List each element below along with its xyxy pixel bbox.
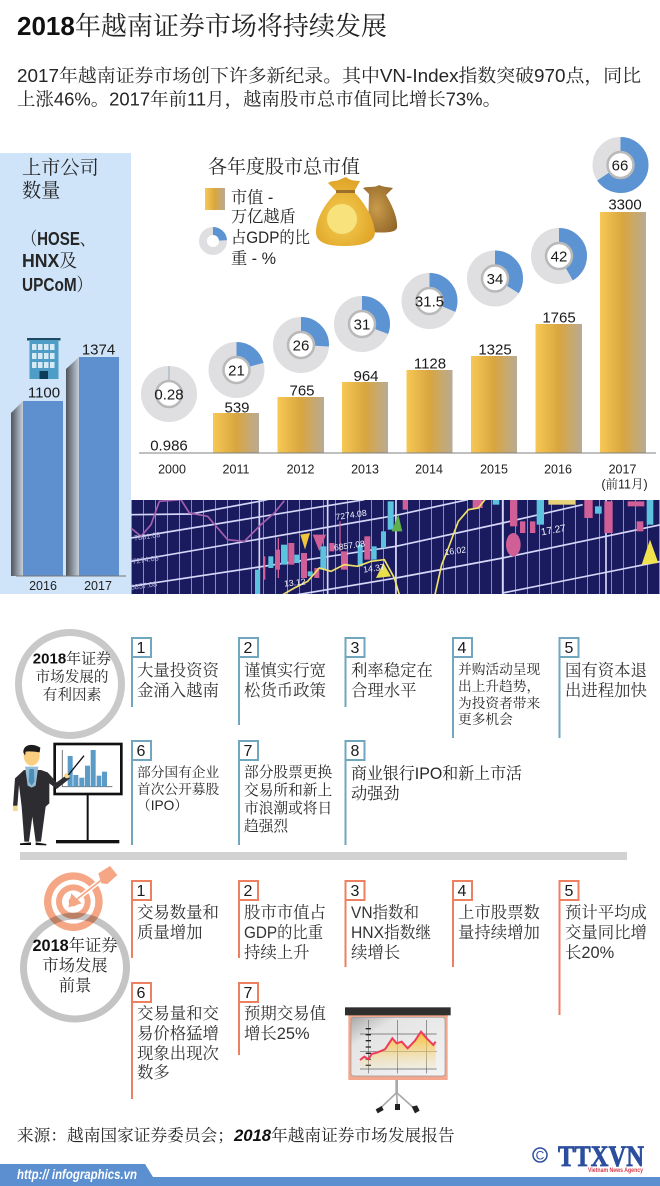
- factor 2: 谨慎实行宽: [244, 661, 326, 680]
- footer band: [0, 1164, 660, 1186]
- year 2012: 2012: [287, 462, 314, 476]
- year 2014: 1128: [414, 356, 446, 372]
- stock chart photo: 16.02: [444, 544, 467, 557]
- outlook 5: 5: [565, 883, 574, 900]
- outlook 7: 增长25%: [244, 1025, 310, 1043]
- stock chart photo: 6857.08: [130, 579, 158, 592]
- outlook 7: [239, 983, 326, 1055]
- outlook 6: 现象出现次: [137, 1045, 219, 1063]
- year 2015: 34: [487, 271, 503, 288]
- year 2017: [600, 145, 648, 492]
- year 2000: 0.986: [150, 438, 188, 454]
- year 2017: 2017: [609, 462, 636, 476]
- factor 1: 1: [137, 640, 146, 657]
- outlook 7: 7: [244, 985, 253, 1002]
- factor 8: 商业银行IPO和新上市活: [351, 765, 522, 783]
- outlook 4: [453, 881, 540, 967]
- factor 8: 8: [351, 743, 360, 760]
- factor 4: 更多机会: [458, 711, 513, 727]
- factor 6: [132, 741, 219, 845]
- year 2017: (前11月): [601, 478, 648, 492]
- factor 3: 3: [351, 640, 360, 657]
- panel heading: UPCoM）: [22, 275, 92, 295]
- factor 4: 并购活动呈现: [458, 661, 540, 677]
- outlook 3: 续增长: [351, 944, 400, 962]
- factor 6: 部分国有企业: [137, 765, 219, 780]
- outlook 2: [239, 881, 326, 962]
- outlook 6: 交易量和交: [137, 1005, 219, 1023]
- factor 7: 7: [244, 743, 253, 760]
- footer band: http:// infographics.vn: [17, 1166, 137, 1182]
- outlook 5: [560, 881, 647, 1015]
- year 2017: 66: [612, 158, 628, 174]
- factor 6: （IPO）: [137, 798, 188, 813]
- year 2016: 1765: [542, 310, 576, 326]
- outlook 3: 3: [351, 883, 360, 900]
- outlook 7: 预期交易值: [244, 1005, 326, 1023]
- factor 5: 出进程加快: [565, 682, 647, 700]
- title: 2018年越南证券市场将持续发展: [17, 11, 387, 41]
- outlook 5: 长20%: [565, 944, 614, 962]
- presenter: [13, 745, 84, 845]
- outlook 3: [346, 881, 431, 967]
- year 2015: 1325: [478, 342, 512, 358]
- bar: 2017 companies: [66, 342, 119, 593]
- panel heading: （HOSE、: [22, 229, 95, 249]
- logo: TTXVN: C: [536, 1148, 545, 1162]
- outlook 5: 交量同比增: [565, 924, 647, 942]
- logo: TTXVN: TTXVN: [558, 1140, 644, 1173]
- outlook 3: VN指数和: [351, 904, 419, 922]
- factor 2: 松货币政策: [244, 682, 326, 700]
- year 2017: 3300: [608, 196, 642, 214]
- year 2011: 539: [224, 400, 250, 416]
- icon: money bags: [316, 177, 397, 246]
- circle: development outlook: 市场发展: [42, 957, 108, 975]
- year 2012: 26: [293, 338, 309, 354]
- stock chart photo: 7881.08: [133, 530, 161, 543]
- factor 8: [346, 741, 522, 845]
- logo: TTXVN: [533, 1140, 644, 1174]
- circle: development outlook: 2018年证券: [32, 936, 118, 955]
- icon: projector screen with line chart: [345, 1007, 451, 1113]
- circle: development outlook: [24, 916, 126, 1019]
- stock chart photo: 14.37: [363, 562, 386, 575]
- source note: 来源：越南国家证券委员会；2018年越南证券市场发展报告: [17, 1125, 455, 1145]
- outlook 6: [132, 983, 219, 1099]
- panel heading: 上市公司: [22, 157, 99, 179]
- outlook 3: HNX指数继: [351, 924, 431, 942]
- presentation board: [55, 744, 121, 843]
- bar: 2017 companies: 1374: [82, 342, 115, 358]
- legend: [203, 188, 310, 268]
- panel heading: HNX及: [22, 251, 77, 271]
- stock chart photo: 13.12: [283, 576, 306, 589]
- factor 7: 交易所和新上: [244, 782, 332, 799]
- factor 1: [132, 638, 220, 707]
- bar chart: market capitalisation: [139, 145, 656, 492]
- intro text: 上涨46%。2017年前11月，越南股市总市值同比增长73%。: [17, 88, 501, 110]
- icon: presenter with chart: [13, 744, 121, 845]
- factor 5: 5: [565, 640, 574, 657]
- year 2015: 2015: [480, 462, 508, 476]
- factor 5: [560, 638, 647, 738]
- factor 2: 2: [244, 640, 253, 657]
- factor 4: 出上升趋势，: [458, 678, 540, 695]
- year 2012: 765: [289, 382, 315, 400]
- factor 4: 4: [458, 640, 467, 657]
- legend donut: [203, 231, 223, 251]
- bar: 2016 companies: 2016: [29, 579, 57, 593]
- year 2011: 21: [228, 362, 245, 380]
- outlook 2: 股市市值占: [244, 904, 326, 922]
- year 2013: [342, 304, 388, 476]
- bar: 2017 companies: 2017: [84, 579, 112, 593]
- year 2011: 2011: [223, 462, 249, 476]
- factor 1: 金涌入越南: [137, 682, 219, 700]
- outlook 6: 易价格猛增: [137, 1025, 219, 1043]
- year 2016: 2016: [544, 462, 572, 476]
- outlook 4: 上市股票数: [458, 904, 540, 922]
- circle: favourable factors: [18, 632, 122, 736]
- outlook 5: 预计平均成: [565, 904, 647, 922]
- panel heading: [22, 157, 99, 295]
- factor 6: 6: [137, 743, 146, 760]
- factor 2: [239, 638, 326, 725]
- year 2000: 0.28: [154, 386, 184, 404]
- factor 4: 为投资者带来: [458, 695, 540, 711]
- stock chart photo: 7274.08: [335, 508, 367, 522]
- year 2014: 2014: [415, 462, 443, 476]
- legend: 万亿越盾: [231, 208, 296, 226]
- year 2016: 42: [551, 248, 567, 266]
- stock chart photo: 6857.08: [333, 538, 366, 553]
- outlook 4: 4: [458, 883, 467, 900]
- year 2014: [406, 281, 452, 476]
- factor 1: 大量投资资: [137, 662, 220, 680]
- outlook 1: 交易数量和: [137, 904, 219, 922]
- icon: building: [27, 338, 60, 379]
- logo: TTXVN: Vietnam News Agency: [588, 1168, 644, 1174]
- stock chart photo: [130, 498, 660, 598]
- legend: 占GDP的比: [231, 229, 310, 247]
- factor 7: 趋强烈: [244, 818, 288, 835]
- legend: 重 - %: [231, 250, 276, 268]
- year 2016: [536, 236, 582, 476]
- intro text: [17, 65, 641, 110]
- outlook list: [132, 881, 647, 1099]
- outlook 2: 持续上升: [244, 944, 310, 962]
- circle: favourable factors: 市场发展的: [36, 668, 108, 686]
- outlook 2: 2: [244, 883, 253, 900]
- year 2013: 31: [354, 316, 370, 334]
- stock chart photo: 7274.08: [132, 553, 159, 566]
- outlook 1: 质量增加: [137, 924, 203, 942]
- year 2015: [471, 258, 517, 476]
- panel: listed companies: [0, 153, 131, 594]
- legend: 市值 -: [231, 189, 273, 207]
- bar: 2016 companies: [11, 384, 63, 593]
- panel heading: 数量: [22, 180, 60, 202]
- factor 7: [239, 741, 332, 845]
- factor 7: 部分股票更换: [244, 764, 332, 781]
- factors list: [132, 638, 647, 845]
- factor 5: 国有资本退: [565, 662, 647, 680]
- year 2014: 31.5: [415, 294, 444, 310]
- intro text: 2017年越南证券市场创下许多新纪录。其中VN-Index指数突破970点，同比: [17, 65, 641, 86]
- year 2012: [278, 325, 324, 476]
- factor 6: 首次公开募股: [137, 781, 219, 797]
- outlook 6: 数多: [137, 1064, 170, 1082]
- year 2011: [213, 350, 259, 476]
- factor 8: 动强劲: [351, 785, 400, 803]
- year 2013: 964: [353, 368, 379, 385]
- stock chart photo: 17.27: [540, 523, 567, 538]
- year 2000: 2000: [158, 462, 186, 476]
- year 2013: 2013: [351, 462, 379, 476]
- icon: target with arrow: [44, 866, 117, 931]
- circle: favourable factors: 2018年证券: [33, 650, 111, 668]
- factor 3: 利率稳定在: [351, 662, 433, 680]
- factor 4: [453, 638, 540, 738]
- factor 7: 市浪潮或将日: [244, 800, 332, 817]
- factor 3: 合理水平: [351, 682, 417, 700]
- outlook 2: GDP的比重: [244, 924, 323, 942]
- outlook 6: 6: [137, 985, 146, 1002]
- circle: favourable factors: 有利因素: [43, 686, 101, 704]
- circle: development outlook: 前景: [59, 977, 91, 995]
- outlook 4: 量持续增加: [458, 924, 540, 942]
- outlook 1: 1: [137, 883, 146, 900]
- chart heading: 各年度股市总市值: [208, 156, 360, 178]
- outlook 1: [132, 881, 219, 958]
- bar: 2016 companies: 1100: [28, 384, 60, 402]
- factor 3: [346, 638, 433, 707]
- year 2000: [149, 366, 189, 476]
